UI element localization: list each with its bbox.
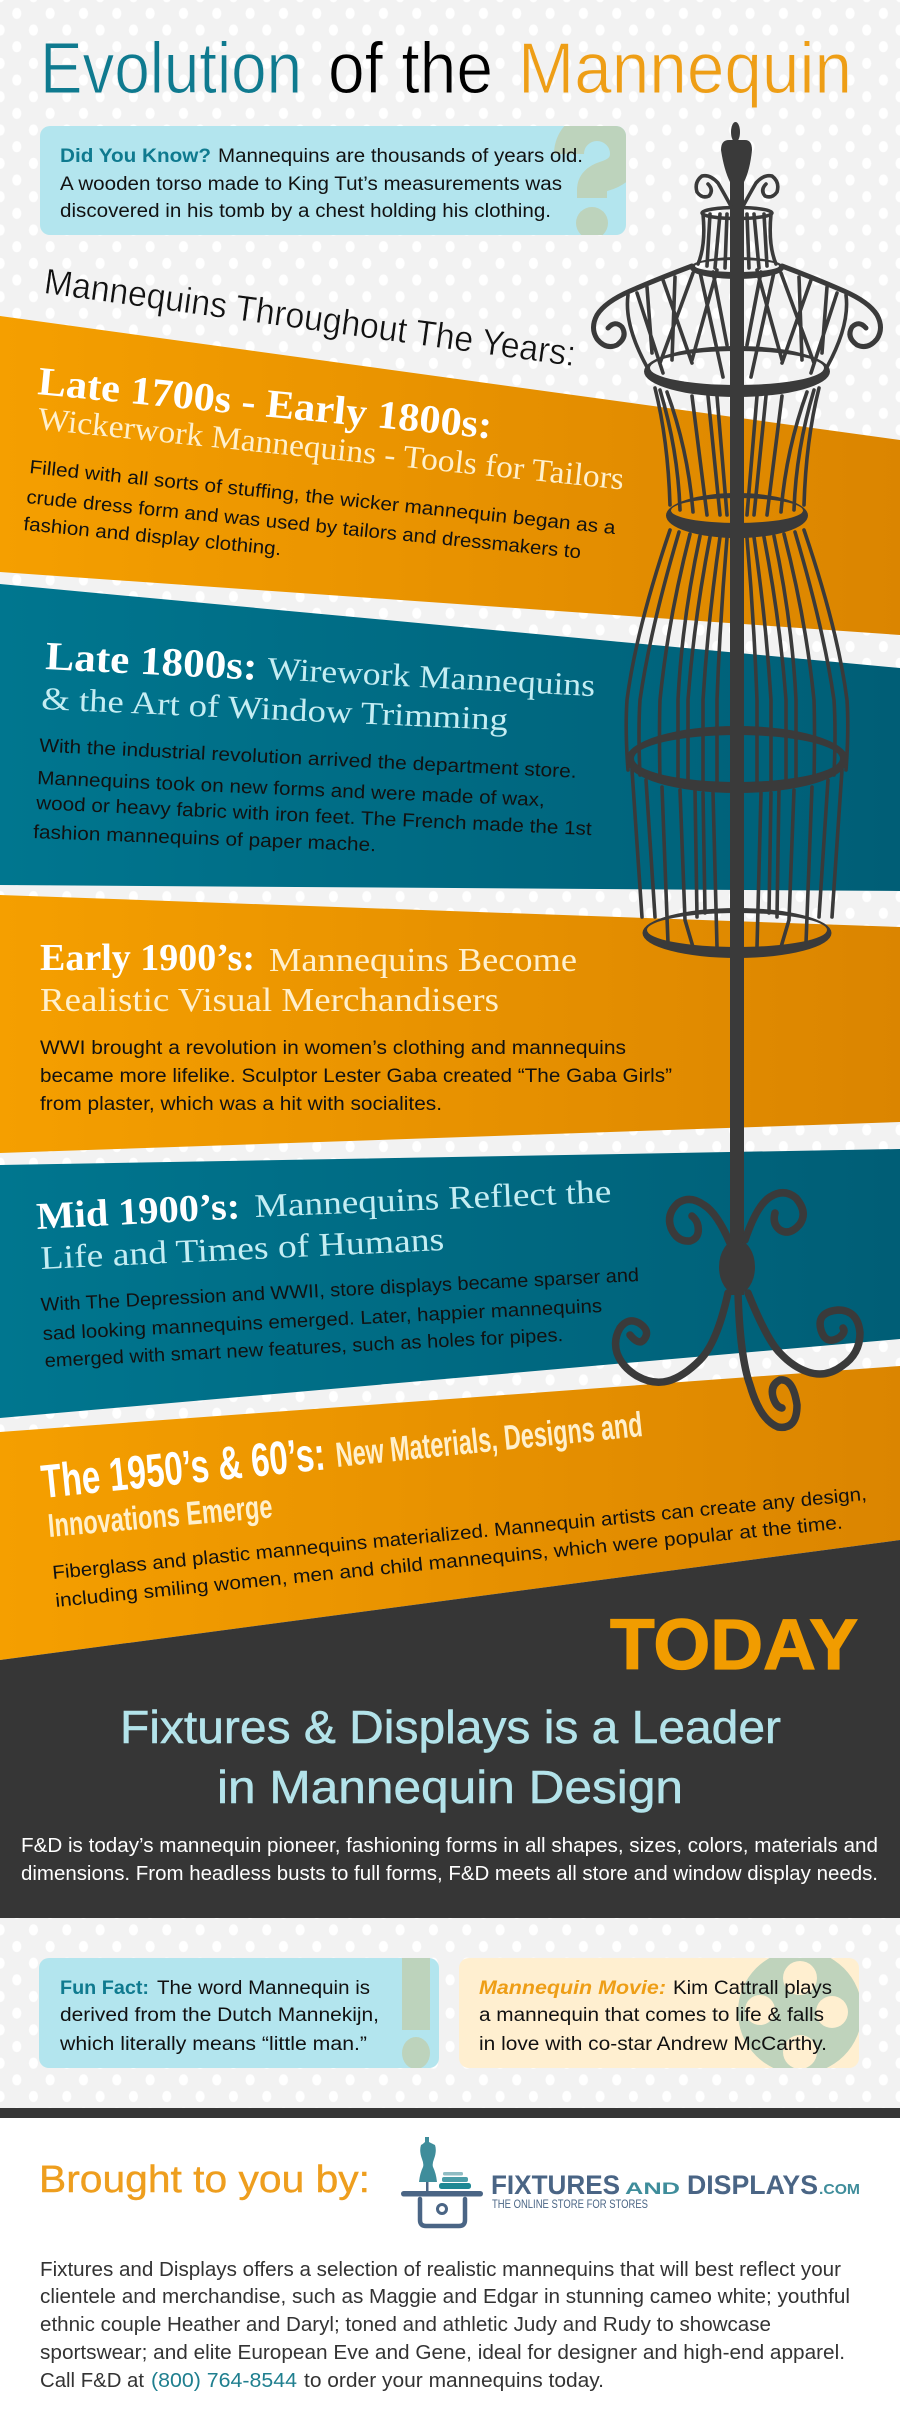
- text: footer body: [40, 2259, 850, 2392]
- text: footer body: clientele and merchandise, such as Maggie and Edgar in stunning cameo white; youthful: [40, 2286, 850, 2308]
- text: wicker body: fashion and display clothing.: [23, 514, 282, 560]
- callout: mannequin movie: [459, 1958, 859, 2068]
- panel: late 1700s - early 1800s: [0, 316, 900, 635]
- panel: the 1950s and 60s: [0, 1366, 900, 1660]
- text: wirework body: wood or heavy fabric with iron feet. The French made the 1st: [35, 793, 593, 840]
- heading: realistic visual merchandisers: Realistic Visual Merchandisers: [40, 982, 499, 1019]
- text: wicker body: [23, 457, 617, 563]
- title: Evolution: [40, 29, 302, 109]
- heading: brought to you by: Brought to you by:: [39, 2159, 370, 2201]
- callout: fun fact: The word Mannequin is: [157, 1978, 370, 1999]
- callout: fun fact: Fun Fact:: [60, 1978, 149, 1999]
- heading: leader in mannequin design: in Mannequin Design: [217, 1761, 683, 1813]
- text: footer body: sportswear; and elite European Eve and Gene, ideal for designer and high-end apparel.: [40, 2342, 845, 2364]
- text: depression body: emerged with smart new features, such as holes for pipes.: [44, 1325, 564, 1372]
- callout: mannequin movie: Kim Cattrall plays: [673, 1978, 832, 1999]
- text: gaba girls body: WWI brought a revolution in women’s clothing and mannequins: [40, 1038, 626, 1059]
- text: gaba girls body: from plaster, which was a hit with socialites.: [40, 1094, 442, 1115]
- logo: fixtures and displays: [401, 2137, 860, 2226]
- heading: life and times of humans: Mannequins Reflect the: [254, 1174, 612, 1225]
- heading: new materials: Innovations Emerge: [46, 1488, 274, 1544]
- text: depression body: [40, 1265, 639, 1372]
- text: footer body: Fixtures and Displays offers a selection of realistic mannequins that will best reflect your: [40, 2259, 841, 2281]
- logo: fixtures and displays: DISPLAYS: [687, 2170, 818, 2200]
- left half of wire form: [594, 176, 733, 947]
- icon: exclamation mark: [402, 1958, 430, 2069]
- text: wirework body: fashion mannequins of paper mache.: [33, 822, 376, 856]
- heading: life and times of humans: Mid 1900’s:: [35, 1185, 241, 1238]
- text: depression body: With The Depression and WWII, store displays became sparser and: [40, 1265, 639, 1316]
- subtitle: mannequins throughout the years: Mannequins Throughout The Years:: [42, 260, 578, 374]
- text: today body: dimensions. From headless busts to full forms, F&D meets all store and window display needs.: [21, 1863, 878, 1885]
- logo: fixtures and displays: FIXTURES: [491, 2170, 620, 2200]
- rings: [626, 257, 848, 958]
- heading: realistic visual merchandisers: [40, 937, 577, 1019]
- heading: new materials: The 1950’s & 60’s:: [39, 1426, 328, 1508]
- heading: wickerwork mannequins: [36, 358, 626, 497]
- pole: [730, 180, 744, 1295]
- text: wirework body: Mannequins took on new forms and were made of wax,: [37, 768, 545, 811]
- text: footer body: Call F&D at: [40, 2370, 144, 2392]
- icon: logo mannequin, shelf and basket: [401, 2137, 483, 2226]
- callout: mannequin movie: in love with co-star Andrew McCarthy.: [479, 2034, 827, 2055]
- text: gaba girls body: became more lifelike. Sculptor Lester Gaba created “The Gaba Girls”: [40, 1066, 672, 1087]
- heading: wickerwork mannequins: Wickerwork Mannequins - Tools for Tailors: [36, 400, 626, 497]
- heading: realistic visual merchandisers: Early 1900’s:: [40, 937, 255, 979]
- panel: early 1900s: [0, 895, 900, 1153]
- callout: fun fact: [39, 1958, 439, 2069]
- heading: leader in mannequin design: [120, 1701, 781, 1813]
- callout: did you know: Mannequins are thousands of years old.: [218, 146, 583, 167]
- text: footer body: ethnic couple Heather and Daryl; toned and athletic Judy and Rudy to showcase: [40, 2314, 771, 2336]
- heading: wirework mannequins: Late 1800s:: [45, 633, 259, 689]
- text: gaba girls body: [40, 1038, 672, 1115]
- heading: life and times of humans: Life and Times of Humans: [40, 1222, 445, 1277]
- logo: fixtures and displays: THE ONLINE STORE FOR STORES: [492, 2197, 648, 2211]
- text: depression body: sad looking mannequins emerged. Later, happier mannequins: [42, 1296, 603, 1345]
- collar ring: [702, 208, 772, 218]
- icon: question mark: [569, 126, 625, 239]
- panel: late 1800s: [0, 584, 900, 891]
- heading: wirework mannequins: & the Art of Window Trimming: [41, 680, 509, 737]
- logo: fixtures and displays: AND: [625, 2179, 680, 2198]
- text: footer body: (800) 764-8544: [151, 2370, 297, 2392]
- callout: fun fact: which literally means “little man.”: [59, 2034, 367, 2055]
- callout: did you know: discovered in his tomb by a chest holding his clothing.: [60, 201, 551, 222]
- title: of the: [328, 29, 493, 109]
- text: fiberglass body: [51, 1484, 868, 1612]
- callout: fun fact: derived from the Dutch Mannekijn,: [60, 2005, 379, 2026]
- heading: new materials: New Materials, Designs and: [334, 1405, 644, 1475]
- heading: today: TODAY: [610, 1606, 858, 1685]
- callout: did you know: A wooden torso made to King Tut’s measurements was: [60, 174, 562, 195]
- text: wicker body: Filled with all sorts of stuffing, the wicker mannequin began as a: [28, 457, 617, 539]
- heading: new materials: [39, 1405, 644, 1544]
- footer panel: [0, 2108, 900, 2428]
- heading: life and times of humans: [35, 1174, 612, 1277]
- text: fiberglass body: Fiberglass and plastic mannequins materialized. Mannequin artists can create any design,: [51, 1484, 868, 1584]
- text: wirework body: [33, 736, 593, 856]
- illustration: wire dress form mannequin: [594, 122, 880, 1427]
- callout: did you know: [40, 126, 626, 239]
- panel: mid 1900s: [0, 1149, 900, 1418]
- text: wirework body: With the industrial revolution arrived the department store.: [39, 736, 577, 783]
- text: footer body: to order your mannequins today.: [304, 2370, 604, 2392]
- callout: did you know: Did You Know?: [60, 146, 211, 167]
- text: wicker body: crude dress form and was used by tailors and dressmakers to: [26, 487, 582, 563]
- text: today body: F&D is today’s mannequin pioneer, fashioning forms in all shapes, sizes, colors, materials and: [21, 1835, 878, 1857]
- heading: leader in mannequin design: Fixtures & Displays is a Leader: [120, 1701, 781, 1753]
- text: fiberglass body: including smiling women, men and child mannequins, which were popular at the time.: [54, 1513, 844, 1612]
- icon: film reel: [738, 1958, 859, 2068]
- logo: fixtures and displays: .COM: [819, 2181, 860, 2198]
- text: today body: [21, 1835, 878, 1885]
- callout: mannequin movie: a mannequin that comes to life & falls: [479, 2005, 824, 2026]
- heading: wickerwork mannequins: Late 1700s - Early 1800s:: [36, 358, 494, 447]
- heading: wirework mannequins: [41, 633, 596, 737]
- title: Mannequin: [518, 29, 852, 109]
- heading: realistic visual merchandisers: Mannequins Become: [269, 942, 577, 979]
- panel: today: [0, 1540, 900, 1918]
- finial: [721, 122, 752, 182]
- callout: mannequin movie: Mannequin Movie:: [479, 1978, 666, 1999]
- title: [40, 29, 852, 109]
- heading: wirework mannequins: Wirework Mannequins: [267, 650, 596, 703]
- base scroll feet: [616, 1193, 860, 1427]
